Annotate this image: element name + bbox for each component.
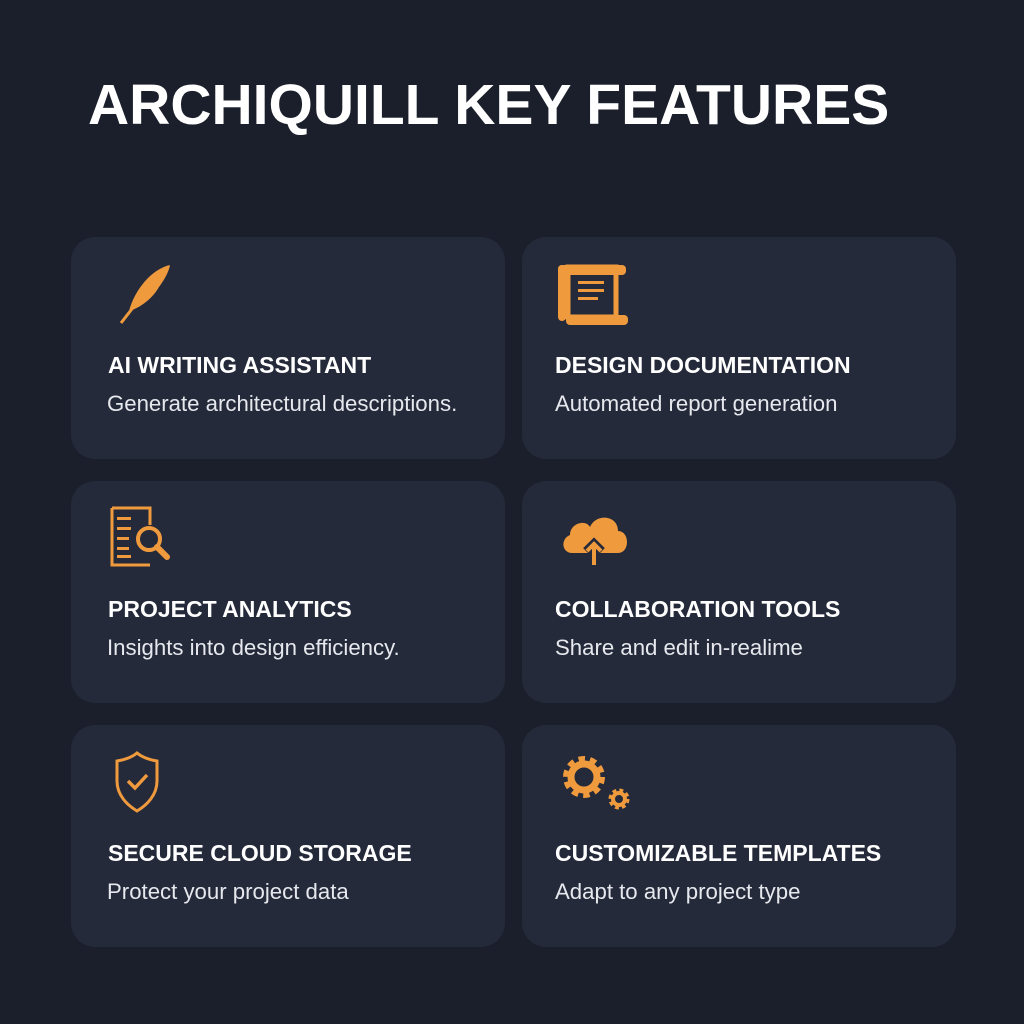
icon: document search: [110, 506, 170, 566]
panel: project analytics: [71, 481, 505, 703]
icon: cloud upload: [563, 518, 627, 565]
description: Insights into design efficiency.: [107, 635, 400, 660]
panel: ai writing assistant: [71, 237, 505, 459]
panel: customizable templates: [522, 725, 956, 947]
title: ARCHIQUILL KEY FEATURES: [88, 73, 889, 137]
description: Adapt to any project type: [555, 879, 800, 904]
description: Share and edit in-realime: [555, 635, 803, 660]
description: Generate architectural descriptions.: [107, 391, 457, 416]
icon: scroll: [558, 264, 628, 325]
icon: gears: [563, 756, 630, 810]
icon: shield check: [116, 751, 158, 813]
description: Protect your project data: [107, 879, 349, 904]
heading: AI WRITING ASSISTANT: [108, 352, 371, 378]
heading: PROJECT ANALYTICS: [108, 596, 352, 622]
panel: secure cloud storage: [71, 725, 505, 947]
description: Automated report generation: [555, 391, 837, 416]
panel: design documentation: [522, 237, 956, 459]
heading: CUSTOMIZABLE TEMPLATES: [555, 840, 881, 866]
heading: SECURE CLOUD STORAGE: [108, 840, 412, 866]
panel: collaboration tools: [522, 481, 956, 703]
heading: COLLABORATION TOOLS: [555, 596, 840, 622]
icon: feather: [120, 265, 170, 324]
heading: DESIGN DOCUMENTATION: [555, 352, 851, 378]
